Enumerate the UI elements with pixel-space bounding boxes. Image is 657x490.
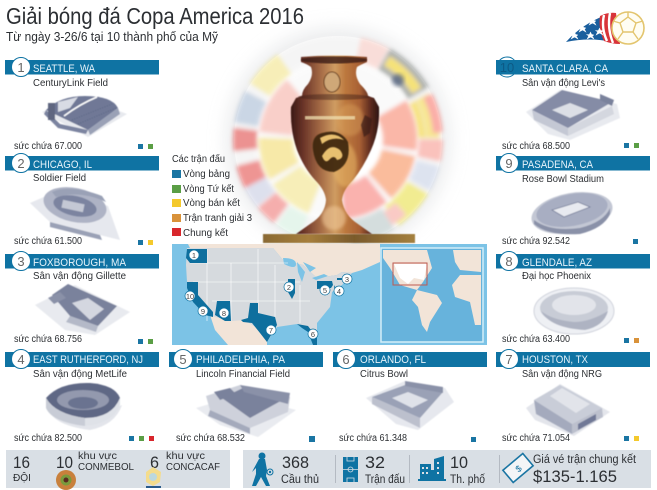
map number markers: 8 [222, 309, 226, 318]
panel: teams summary: ĐỘI [13, 471, 31, 484]
panel: Orlando: 6 [342, 352, 350, 367]
panel: tournament facts: 10 [450, 453, 468, 472]
map number markers [185, 250, 352, 339]
icon: stadium CenturyLink Field [42, 96, 127, 137]
panel: Houston: HOUSTON, TX [522, 354, 589, 366]
panel: East Rutherford: 4 [17, 352, 25, 367]
panel: tournament facts: $135-1.165 [533, 467, 617, 486]
panel: Glendale: Đại học Phoenix [522, 271, 591, 282]
panel: teams summary: 6 [150, 453, 159, 472]
icon: logo ball with US flag swoosh [566, 12, 644, 44]
panel: Chicago: Soldier Field [33, 173, 86, 184]
legend: match rounds: Trận tranh giải 3 [183, 213, 253, 224]
panel: teams summary: CONMEBOL [78, 461, 134, 473]
panel: tournament facts: Th. phố [450, 474, 486, 486]
panel: Foxborough: Sân vận động Gillette [33, 271, 127, 282]
panel: Seattle: SEATTLE, WA [33, 63, 96, 75]
legend: match rounds: Vòng Tứ kết [183, 184, 234, 195]
panel: Chicago: sức chứa 61.500 [14, 236, 82, 247]
trophy cup [291, 56, 379, 234]
panel: Chicago [5, 154, 159, 247]
panel: Pasadena: 9 [505, 156, 513, 171]
panel: Pasadena: sức chứa 92.542 [502, 236, 570, 247]
panel: East Rutherford [5, 350, 159, 444]
icon: stadium Lincoln Financial Field [196, 385, 296, 437]
legend: match rounds: Vòng bảng [183, 169, 230, 180]
icon: city buildings [418, 456, 446, 481]
panel: Houston [496, 350, 650, 444]
panel: Pasadena: Rose Bowl Stadium [522, 174, 604, 185]
map number markers: 1 [192, 251, 196, 260]
panel: Pasadena: PASADENA, CA [522, 159, 594, 171]
panel: Houston: Sân vận động NRG [522, 369, 602, 380]
inset world map [381, 248, 483, 342]
map of host states [172, 244, 487, 345]
panel: teams summary: CONCACAF [166, 461, 220, 473]
panel: tournament facts: Cầu thủ [281, 474, 319, 486]
panel: Glendale: GLENDALE, AZ [522, 257, 592, 269]
icon: CONCACAF logo [146, 467, 161, 488]
map number markers: 3 [345, 275, 349, 284]
panel: Foxborough: FOXBOROUGH, MA [33, 257, 127, 269]
legend: match rounds: Các trận đấu [172, 154, 225, 165]
icon: stadium NRG [526, 384, 610, 436]
icon: ticket: $ [514, 463, 524, 474]
panel: Glendale [496, 252, 650, 345]
panel: Glendale: sức chứa 63.400 [502, 334, 570, 345]
panel: teams summary: 16 [13, 453, 30, 472]
panel: tournament facts: 368 [282, 453, 309, 472]
highlighted host states [186, 249, 343, 345]
panel: Santa Clara: SANTA CLARA, CA [522, 63, 609, 75]
panel: Philadelphia [169, 350, 323, 444]
panel: Seattle: sức chứa 67.000 [14, 141, 82, 152]
panel: Chicago: CHICAGO, IL [33, 159, 92, 171]
panel: Pasadena [496, 154, 650, 247]
panel: Orlando: Citrus Bowl [360, 369, 408, 380]
panel: teams summary: khu vực [78, 450, 117, 462]
panel: Philadelphia: sức chứa 68.532 [176, 433, 245, 444]
panel: East Rutherford: sức chứa 82.500 [14, 433, 82, 444]
panel: tournament facts: Giá vé trận chung kết [533, 454, 637, 466]
panel: tournament facts [243, 450, 651, 488]
panel: Philadelphia: 5 [179, 352, 187, 367]
panel: Seattle: 1 [17, 60, 25, 75]
panel: Houston: 7 [505, 352, 513, 367]
icon: stadium Gillette [35, 284, 130, 335]
panel: Santa Clara: sức chứa 68.500 [502, 141, 570, 152]
panel: East Rutherford: EAST RUTHERFORD, NJ [33, 354, 143, 366]
trophy [263, 56, 415, 243]
panel: Foxborough: 3 [17, 254, 25, 269]
icon: football pitch [343, 457, 358, 482]
trophy base plate [263, 234, 415, 243]
panel: Seattle: CenturyLink Field [33, 78, 108, 89]
subtitle: Từ ngày 3-26/6 tại 10 thành phố của Mỹ [6, 30, 219, 44]
legend: match rounds: Vòng bán kết [183, 198, 240, 209]
map number markers: 6 [311, 330, 315, 339]
panel: Orlando: sức chứa 61.348 [339, 433, 407, 444]
map number markers: 5 [323, 286, 327, 295]
icon: stadium Citrus Bowl [366, 381, 454, 430]
map number markers: 2 [287, 283, 291, 292]
panel: teams summary: khu vực [166, 450, 205, 462]
panel: Orlando [333, 350, 487, 444]
panel: Santa Clara [496, 57, 650, 152]
legend: match rounds: Chung kết [183, 228, 228, 239]
icon: stadium Soldier Field [30, 182, 120, 240]
panel: Philadelphia: PHILADELPHIA, PA [196, 354, 286, 366]
panel: Houston: sức chứa 71.054 [502, 433, 570, 444]
icon: stadium University of Phoenix [534, 288, 614, 334]
icon: stadium MetLife [46, 383, 122, 430]
panel: Philadelphia: Lincoln Financial Field [196, 369, 290, 380]
panel: tournament facts: Trận đấu [365, 474, 405, 486]
panel: Glendale: 8 [505, 254, 513, 269]
trophy backdrop: wheel of team flags [204, 6, 472, 274]
map number markers: 7 [269, 326, 273, 335]
legend: match rounds [172, 154, 253, 239]
panel: Seattle [5, 58, 159, 152]
map number markers: 9 [201, 307, 205, 316]
panel: teams summary: 10 [56, 453, 73, 472]
icon: football player [252, 452, 273, 486]
panel: Foxborough: sức chứa 68.756 [14, 334, 82, 345]
panel: Foxborough [5, 252, 159, 345]
panel: tournament facts: 32 [365, 453, 385, 472]
icon: CONMEBOL logo [56, 470, 76, 490]
panel: teams summary [6, 450, 230, 490]
icon: stadium Rose Bowl [528, 186, 616, 240]
title: Giải bóng đá Copa America 2016 [6, 3, 304, 29]
map number markers: 4 [337, 287, 341, 296]
panel: East Rutherford: Sân vận động MetLife [33, 369, 128, 380]
icon: ticket [503, 454, 533, 482]
panel: Santa Clara: Sân vận động Levi's [522, 78, 605, 89]
panel: Santa Clara: 10 [500, 60, 514, 75]
panel: Chicago: 2 [17, 156, 25, 171]
panel: Orlando: ORLANDO, FL [360, 354, 426, 366]
map number markers: 10 [186, 292, 194, 301]
icon: stadium Levi's [526, 90, 620, 140]
